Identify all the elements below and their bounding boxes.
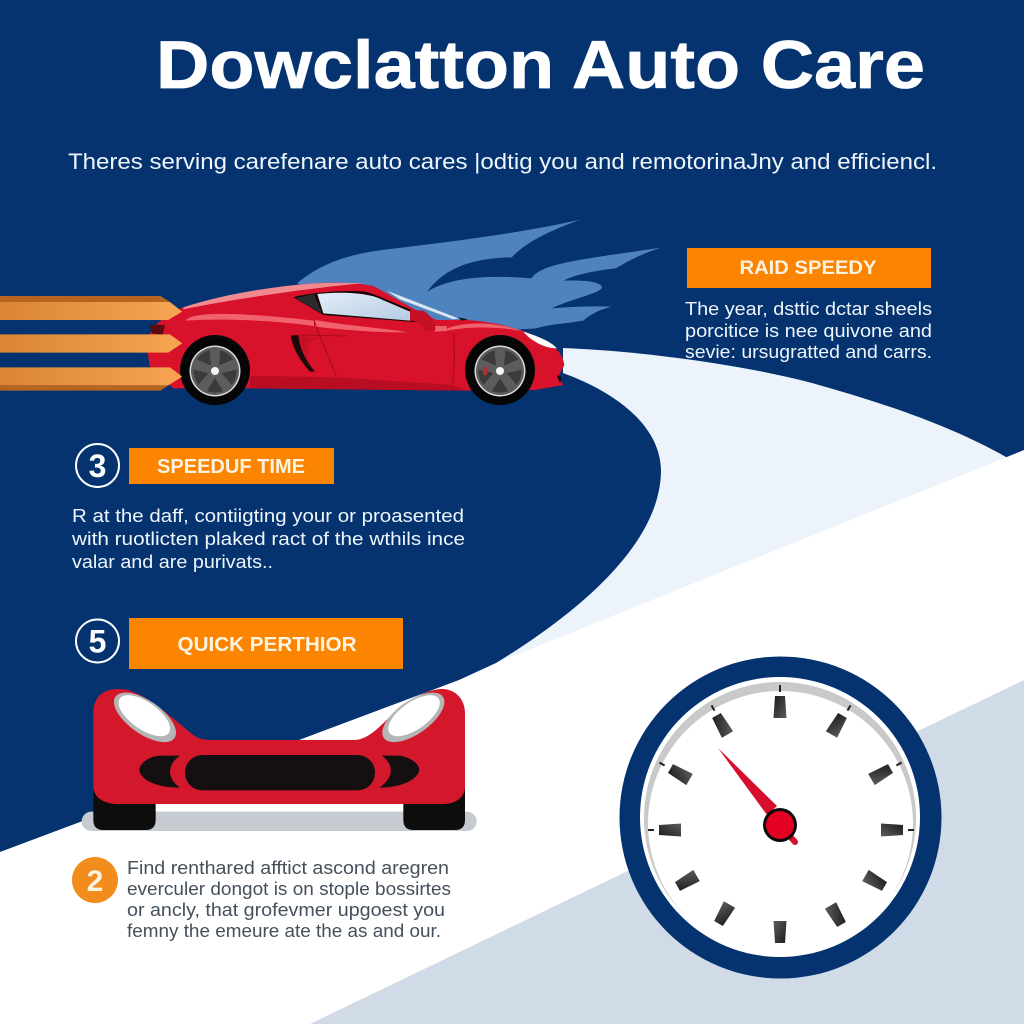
speedometer gauge xyxy=(620,656,942,978)
subtitle: Theres serving carefenare auto cares |odtig you and remotorinaJny and efficiencl. xyxy=(68,149,937,174)
orange speed streaks xyxy=(0,296,182,391)
text: raid speedy: sevie: ursugratted and carrs. xyxy=(685,342,932,362)
text: raid speedy: porcitice is nee quivone and xyxy=(685,321,932,341)
heading: speed up time: SPEEDUF TIME xyxy=(157,456,305,478)
text: speed up time: with ruotlicten plaked ract of the wthils ince xyxy=(71,528,465,549)
text: find xyxy=(127,858,451,941)
panel: raid speedy xyxy=(685,248,932,362)
text: speed up time: valar and are purivats.. xyxy=(72,551,273,572)
road curve xyxy=(496,348,1024,700)
panel: quick perthior xyxy=(76,618,403,669)
car body xyxy=(147,283,564,391)
text: find: femny the emeure ate the as and our. xyxy=(127,921,441,941)
white lower area xyxy=(0,450,1024,1024)
slate corner xyxy=(310,680,1024,1024)
side view red sports car xyxy=(147,283,564,405)
badge 5 xyxy=(76,620,119,662)
gauge needle xyxy=(718,748,797,842)
badge 3: 3 xyxy=(89,448,106,484)
heading: raid speedy xyxy=(687,248,931,288)
badge 3 xyxy=(76,444,119,487)
text: find: Find renthared afftict ascond aregren xyxy=(127,858,449,878)
text: find: everculer dongot is on stople bossirtes xyxy=(127,879,451,899)
panel: find text xyxy=(72,857,451,941)
heading: quick perthior xyxy=(129,618,403,669)
gauge ticks xyxy=(659,696,903,943)
badge 2 xyxy=(72,857,118,903)
rear wheel xyxy=(180,335,250,405)
front view red car xyxy=(82,683,477,831)
heading: raid speedy: RAID SPEEDY xyxy=(740,258,877,279)
badge 5: 5 xyxy=(89,624,106,660)
title: Dowclatton Auto Care xyxy=(156,27,925,103)
text: find: or ancly, that grofevmer upgoest you xyxy=(127,900,445,920)
speed flames xyxy=(297,219,661,333)
front wheel xyxy=(465,335,535,405)
text: speed up time: R at the daff, contiigting your or proasented xyxy=(72,505,464,526)
heading: speed up time xyxy=(129,448,334,484)
text: raid speedy: The year, dsttic dctar sheels xyxy=(685,299,932,319)
panel: speed up time xyxy=(71,444,465,572)
text: raid speedy xyxy=(685,299,932,362)
badge 2: 2 xyxy=(87,865,103,898)
text: speed up time xyxy=(71,505,465,572)
heading: quick perthior: QUICK PERTHIOR xyxy=(178,634,357,656)
